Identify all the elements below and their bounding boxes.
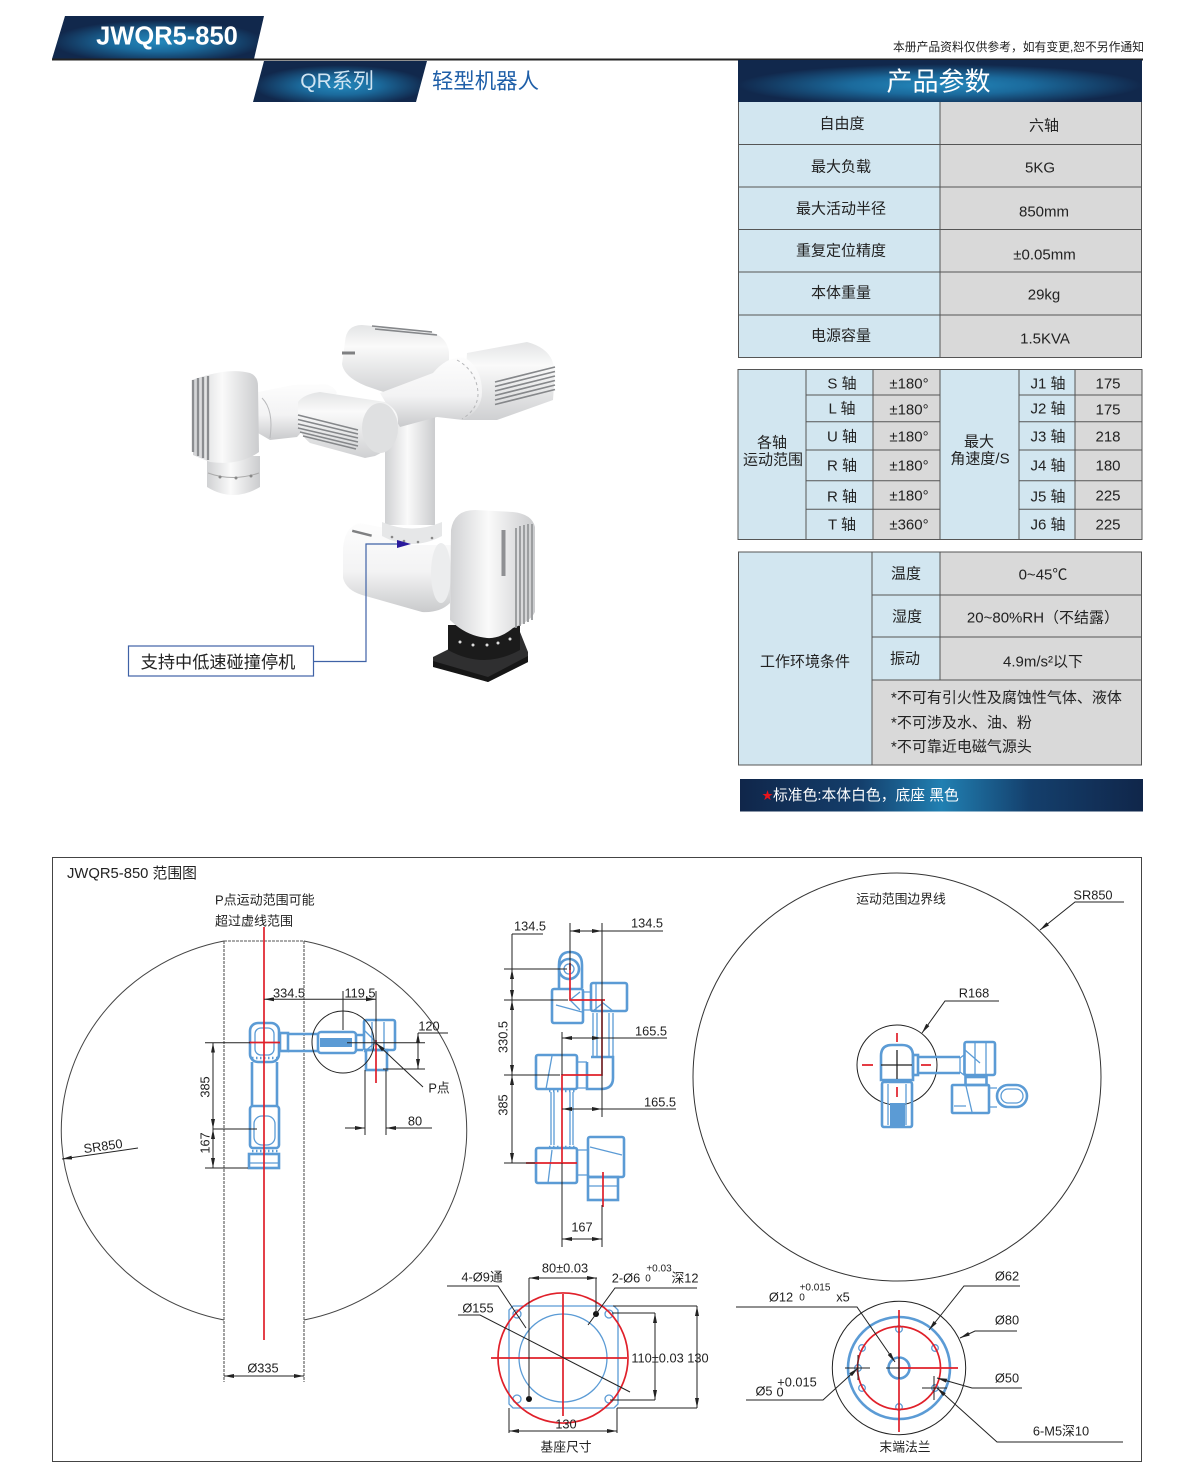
dimension labels: Ø80 [995,1312,1019,1328]
note: P point range [215,892,315,928]
panel: product parameters: 最大活动半径 [796,200,886,218]
panel: axis range and speed: J2 轴 [1030,400,1066,418]
panel: axis range and speed: U 轴 [827,428,857,446]
panel: axis range and speed: ±180° [889,376,929,392]
panel: working environment: *不可有引火性及腐蚀性气体、液体 [891,688,1122,706]
diagram: base dimensions [447,1260,709,1454]
heading: range diagram: JWQR5-850 范围图 [67,865,197,882]
panel: axis range and speed: L 轴 [829,400,855,418]
standard colour banner: ★标准色:本体白色，底座 黑色 [762,787,959,804]
dimension labels: Ø62 [995,1268,1019,1284]
panel: axis range and speed [738,369,1142,540]
diagram: front view dimensions [496,916,676,1247]
dimension labels [755,1268,1089,1454]
series banner: QR系列 [253,61,427,102]
dimension labels: 134.5 [631,916,663,930]
leader lines [736,1286,1123,1442]
column [385,417,435,525]
callout: collision stop [128,540,411,676]
panel: working environment: 20~80%RH（不结露） [967,610,1119,626]
note: P point range: 超过虚线范围 [215,914,293,928]
dimension labels: 4-Ø9通 [461,1270,503,1284]
dimension labels: 165.5 [635,1024,667,1038]
base dark ring [448,625,520,660]
dimension labels: 0 [799,1292,805,1304]
panel: axis range and speed: 175 [1095,402,1121,418]
heading: 产品参数 [738,60,1142,102]
header rule [52,58,1143,60]
series banner: QR系列: QR系列 [300,70,374,93]
dimension labels: 0 [645,1274,651,1284]
dimension labels: 120 [418,1018,440,1034]
panel: axis range and speed: 175 [1095,376,1121,392]
range boundary [61,941,467,1382]
dimension labels: 6-M5深10 [1033,1424,1089,1438]
panel: working environment [738,552,1142,765]
robot top outline [881,1042,1027,1127]
standard colour banner [740,779,1143,812]
diagram: side range [61,892,467,1382]
black base plate [433,632,528,682]
dimension labels [461,1260,709,1454]
panel: working environment: *不可涉及水、油、粉 [891,714,1032,732]
panel: axis range and speed: R 轴 [827,458,857,474]
dimension labels [496,916,676,1234]
panel: product parameters [738,60,1142,358]
dimension labels: 2-Ø6 [612,1270,640,1286]
R168 circle [857,1025,937,1105]
dimension lines [504,923,676,1247]
panel: range diagram frame [52,858,1142,1462]
centre cross [881,1050,912,1079]
panel: working environment: *不可靠近电磁气源头 [891,738,1032,756]
red circle and cross [491,1293,628,1423]
dimension labels: 385 [198,1076,212,1098]
R168 leader [922,986,999,1033]
panel: product parameters: 最大负载 [811,158,871,176]
panel: working environment: 振动 [890,650,920,668]
dimension labels: +0.015 [800,1282,831,1294]
dimension labels: 110±0.03 130 [631,1350,709,1366]
panel: product parameters: 电源容量 [811,328,871,344]
wrist link [258,384,337,440]
panel: axis range and speed: 180 [1095,458,1121,474]
panel: axis range and speed: ±180° [889,402,929,418]
dimension labels: SR850 [83,1136,123,1156]
title banner: JWQR5-850 [52,16,264,59]
boundary circle [693,873,1101,1281]
red joint axis lines [526,963,605,1207]
panel: axis range and speed: 运动范围 [743,452,803,468]
panel: axis range and speed: 最大 [964,434,994,450]
dimension labels: 119.5 [344,986,376,1000]
panel: working environment: 0~45℃ [1019,566,1067,584]
panel: product parameters: 850mm [1019,204,1069,220]
panel: axis range and speed: J3 轴 [1030,428,1066,446]
dimension labels: 165.5 [644,1094,676,1110]
dimension labels: Ø335 [247,1360,279,1376]
lower motor with fins [450,510,535,638]
diagram: top view range [693,873,1124,1281]
robot side outline [249,1020,395,1168]
panel: product parameters: 5KG [1025,160,1055,176]
panel: axis range and speed: ±180° [889,458,929,474]
dimension labels: Ø155 [462,1300,494,1316]
dimension labels: 80 [408,1114,422,1128]
subtitle: 轻型机器人: 轻型机器人 [432,70,539,94]
dimension labels: 167 [571,1220,593,1234]
panel: axis range and speed: J6 轴 [1030,516,1066,534]
dimension labels: 0 [776,1384,784,1400]
callout: collision stop: 支持中低速碰撞停机 [141,652,295,672]
panel: axis range and speed: J4 轴 [1030,458,1066,474]
panel: axis range and speed: ±180° [889,428,929,446]
diagram: end flange [736,1268,1123,1454]
red ticks [862,1033,931,1097]
note: P point range: P点运动范围可能 [215,892,315,908]
centre and hole crosses [845,1355,947,1400]
SR850 leader [1040,888,1124,930]
right motor with fins [463,342,555,420]
dimension labels: Ø50 [995,1370,1019,1386]
base outline [509,1306,618,1408]
panel: axis range and speed: 各轴 [757,434,787,452]
panel: working environment: 温度 [891,566,921,582]
tool flange cylinder [207,456,260,495]
boundary label: 运动范围边界线 [856,892,946,906]
title banner: JWQR5-850: JWQR5-850 [96,22,238,50]
robot front outline [536,952,627,1200]
panel: axis range and speed: J5 轴 [1030,488,1066,506]
pin holes [526,1311,599,1402]
panel: product parameters: 29kg [1028,286,1060,304]
dimension labels: 330.5 [496,1021,510,1053]
upper arm tube [380,358,482,427]
dimension labels: 末端法兰 [879,1440,931,1454]
panel: axis range and speed: 225 [1095,516,1121,534]
dimension labels: +0.03 [646,1264,672,1274]
dimension labels [83,986,450,1376]
R circle [312,1011,374,1073]
dimension labels: 334.5 [273,986,305,1000]
SR850 leader: SR850 [1073,888,1113,902]
dimension lines [62,991,448,1376]
panel: product parameters: 六轴 [1029,118,1059,134]
dimension labels: 385 [496,1094,510,1116]
dimension labels: +0.015 [777,1374,817,1390]
shoulder ring [382,522,442,544]
dimension labels: 167 [198,1132,212,1154]
panel: axis range and speed: ±360° [889,516,929,534]
panel: working environment: 工作环境条件 [760,652,850,670]
dimension labels: 深12 [671,1270,699,1286]
panel: product parameters: 自由度 [819,116,865,132]
forearm with fins [298,392,398,458]
dimension labels: Ø5 [755,1384,773,1398]
dimension lines [447,1278,697,1433]
panel: axis range and speed: R 轴 [827,488,857,506]
robot illustration [192,325,555,682]
dimension labels: Ø12 [769,1290,793,1304]
R168 leader: R168 [959,986,989,1000]
panel: axis range and speed: J1 轴 [1030,376,1066,392]
heading: 产品参数: 产品参数 [886,66,991,96]
panel: working environment: 4.9m/s²以下 [1003,654,1083,670]
panel: axis range and speed: T 轴 [828,516,856,534]
dimension labels: x5 [836,1290,850,1304]
panel: axis range and speed: S 轴 [827,376,857,392]
disclaimer text: 本册产品资料仅供参考，如有变更,恕不另作通知 [893,40,1144,54]
dimension labels: 130 [555,1416,577,1432]
dimension labels: 80±0.03 [542,1260,588,1276]
panel: axis range and speed: 角速度/S [950,450,1010,468]
panel: product parameters: ±0.05mm [1013,246,1076,264]
panel: axis range and speed: 225 [1095,488,1121,504]
panel: product parameters: 重复定位精度 [796,242,886,260]
panel: axis range and speed: ±180° [889,488,929,504]
panel: working environment: 湿度 [892,608,922,626]
lower shoulder [343,523,452,612]
wrist motor with fins [192,371,259,463]
dimension labels: 134.5 [514,918,546,934]
upper motor [342,325,449,396]
dimension labels: 基座尺寸 [540,1440,592,1454]
red pitch circle and cross [857,1310,958,1432]
centre red line [249,927,376,1340]
dimension labels: P点 [428,1080,450,1096]
panel: product parameters: 1.5KVA [1020,330,1070,348]
panel: axis range and speed: 218 [1095,428,1121,446]
outer circle [832,1301,966,1435]
panel: product parameters: 本体重量 [811,284,871,302]
blue rings and holes [848,1317,950,1419]
